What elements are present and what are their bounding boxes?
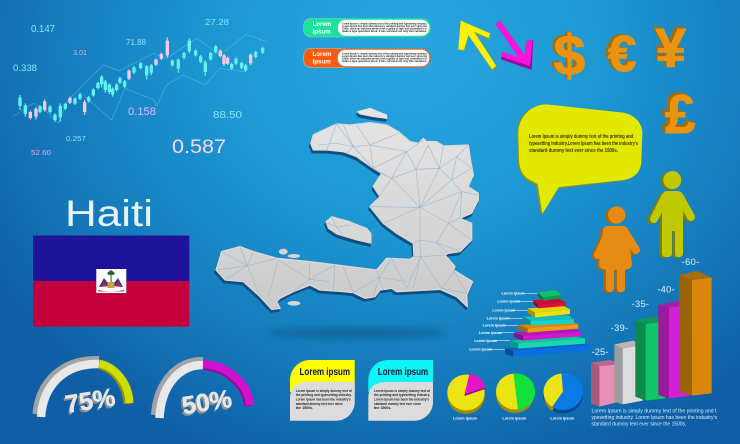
woman shadow side: [596, 207, 634, 293]
candlestick chart: [13, 34, 267, 123]
gauge side: [36, 360, 99, 414]
number 0.158: 0.158: [128, 106, 156, 118]
icon: euro: €: [608, 25, 636, 82]
pyramid leader labels: Lorem Ipsum: [492, 309, 516, 313]
mainland: [216, 123, 478, 309]
icon: yen: ¥: [656, 17, 686, 79]
card text: Lorem Ipsum is simply dummy text of: [374, 389, 431, 393]
man figure: [654, 171, 691, 257]
card text: [374, 389, 431, 410]
icon: pound: £: [665, 83, 696, 145]
icon: yen: ¥: [653, 15, 684, 77]
bubble text: typesetting industry.Lorem Ipsum has been the industry's: [529, 141, 638, 147]
gauge: 75%: [36, 360, 130, 421]
number 52.60: 52.60: [31, 148, 51, 157]
green layer: [538, 290, 562, 301]
flag of Haiti: [33, 236, 189, 327]
gauge face: [41, 364, 99, 417]
card text: Lorem Ipsum has been the industry's: [374, 398, 429, 402]
Gonave island: [326, 217, 371, 243]
card text: Lorem Ipsum has been the industry's: [296, 398, 351, 402]
3D bar chart: [591, 257, 712, 407]
bubble text: [529, 134, 638, 154]
icon: pound: £: [662, 81, 693, 143]
pyramid leader labels: Lorem Ipsum: [487, 317, 510, 321]
text card: cyan: [368, 360, 433, 421]
icon: dollar: $: [554, 24, 585, 88]
card text: the 1500s.: [296, 406, 313, 410]
gauge side: [155, 361, 203, 415]
card text: standard dummy text ever since: [296, 402, 343, 406]
number 0.257: 0.257: [66, 134, 86, 143]
green pill: Ipsum: [312, 28, 331, 36]
card grey body: [368, 382, 433, 421]
card title: Lorem ipsum: [300, 367, 350, 378]
icon: woman: [596, 206, 636, 293]
magenta bar: [658, 301, 689, 398]
pie chart 1: Lorem Ipsum: [453, 416, 478, 420]
gauge value: 50%: [180, 385, 234, 420]
Tortuga island: [358, 108, 387, 118]
pie chart 3: Lorem Ipsum: [550, 416, 575, 420]
pyramid leader labels: Lorem Ipsum: [497, 300, 521, 304]
pyramid leader labels: [469, 292, 525, 352]
card cyan header: [368, 360, 433, 392]
pyramid leader labels: Lorem Ipsum: [479, 331, 503, 335]
card text: the 1500s.: [374, 406, 391, 410]
number 71.88: 71.88: [126, 38, 147, 47]
bar value labels: -35-: [632, 299, 649, 309]
green pill: make a type specimen book. It has survived not only five centuries.: [342, 29, 427, 33]
coat of arms: [96, 269, 126, 293]
yellow layer: [528, 306, 570, 317]
pyramid leader labels: Lorem Ipsum: [502, 292, 525, 296]
teal layer: [510, 337, 585, 349]
pyramid leader labels: Lorem Ipsum: [483, 324, 506, 328]
orange pill: Ipsum: [312, 58, 331, 66]
green pill: [304, 18, 430, 37]
speech bubble: [517, 104, 642, 214]
green pill: Lorem Ipsum has been the industry's standard dummy text ever since the: [342, 24, 427, 28]
green bar: [635, 317, 665, 401]
orange pill: Lorem: [312, 51, 332, 58]
number 0.147: 0.147: [31, 24, 55, 35]
white bar: [614, 341, 643, 404]
yellow segment: [99, 364, 130, 403]
arrow: yellow up-left: [458, 21, 497, 71]
map of Haiti: [215, 108, 478, 312]
green pill: Lorem Ipsum is simply dummy text of the printing and typesetting industry.: [342, 22, 427, 26]
bar chart caption: ypesetting industry. Lorem Ipsum has been the industry's: [592, 415, 717, 421]
icon: dollar: $: [551, 23, 583, 87]
number 0.587: 0.587: [172, 137, 226, 158]
card text: Lorem Ipsum is simply dummy text of: [296, 389, 352, 393]
card text: [296, 389, 352, 410]
gauge face: [160, 365, 203, 418]
magenta layer: [514, 329, 582, 341]
card text: standard dummy text ever since: [374, 402, 421, 406]
orange layer: [518, 322, 578, 333]
map drop shadow: [215, 111, 477, 312]
green pill: Lorem: [312, 21, 332, 28]
magenta segment: [203, 364, 250, 405]
pyramid leader labels: Lorem Ipsum: [474, 339, 498, 343]
bubble text: standard dummy text ever since the 1500s.: [529, 148, 618, 154]
gauge value: 50%: [178, 387, 232, 423]
gauge: 50%: [155, 361, 250, 423]
pyramid chart: [469, 290, 591, 357]
icon: euro: €: [605, 24, 633, 81]
bar value labels: -60-: [682, 257, 699, 267]
map shadow on ground: [267, 328, 447, 338]
number 88.50: 88.50: [213, 110, 243, 121]
red band: [33, 281, 189, 327]
card title: Lorem ipsum: [378, 367, 428, 378]
icon: man: [652, 171, 691, 258]
blue layer: [505, 343, 591, 357]
pyramid leader labels: Lorem Ipsum: [469, 348, 493, 352]
pink bar: [591, 360, 620, 407]
orange pill: [304, 48, 430, 68]
yellow segment side: [99, 365, 128, 404]
pie chart 2: [496, 373, 535, 420]
magenta segment side: [203, 366, 248, 406]
trend lines: [13, 34, 267, 123]
number 0.338: 0.338: [13, 63, 37, 73]
bar chart caption: Lorem Ipsum is simply dummy text of the printing and t: [592, 408, 717, 414]
card text: the printing and typesetting industry.: [296, 393, 352, 397]
country title: Haiti: [65, 193, 153, 234]
number 27.28: 27.28: [205, 17, 229, 27]
bubble shape: [517, 104, 642, 214]
bubble text: Lorem Ipsum is simply dummy text of the printing and: [529, 134, 633, 140]
legend pills: [304, 18, 430, 68]
bar value labels: [592, 257, 699, 357]
green pill: 1500s, when an unknown printer took a galley of type and scrambled it to: [342, 26, 427, 30]
triangulated mesh: [217, 124, 478, 297]
cyan layer: [523, 315, 574, 325]
red layer: [533, 298, 566, 308]
orange pill: Lorem Ipsum has been the industry's standard dummy text ever since the: [342, 54, 427, 58]
bar value labels: -40-: [657, 284, 675, 294]
pie chart 3: [543, 373, 583, 420]
pink candles: [30, 37, 251, 119]
bar chart caption: [592, 408, 717, 428]
woman figure: [598, 206, 636, 292]
currency symbols: [551, 15, 696, 145]
orange pill: Lorem Ipsum is simply dummy text of the printing and typesetting industry.: [342, 52, 427, 56]
orange pill: make a type specimen book. It has survived not only five centuries.: [342, 59, 427, 63]
small islets: [279, 249, 300, 306]
bar value labels: -39-: [611, 323, 628, 333]
orange pill: 1500s, when an unknown printer took a galley of type and scrambled it to: [342, 56, 427, 60]
bar chart caption: standard dummy text ever since the 1500s,: [592, 422, 687, 428]
leader lines: [488, 293, 537, 349]
cyan candles: [20, 38, 263, 122]
man shadow side: [652, 172, 688, 258]
floating numbers: [13, 17, 243, 158]
gauge value: 75%: [63, 383, 117, 419]
orange bar: [679, 271, 712, 396]
bar value labels: -25-: [592, 347, 608, 357]
blue band: [33, 236, 189, 281]
card text: the printing and typesetting industry.: [374, 393, 430, 397]
gauge value: 75%: [62, 386, 115, 421]
pie chart 2: Lorem Ipsum: [502, 416, 527, 420]
text card: yellow: [290, 360, 355, 421]
arrow: magenta down-right: [496, 21, 533, 70]
card yellow header: [290, 360, 355, 392]
pie chart 1: [447, 374, 485, 420]
number 3.01: 3.01: [73, 48, 87, 57]
card grey body: [290, 382, 355, 421]
